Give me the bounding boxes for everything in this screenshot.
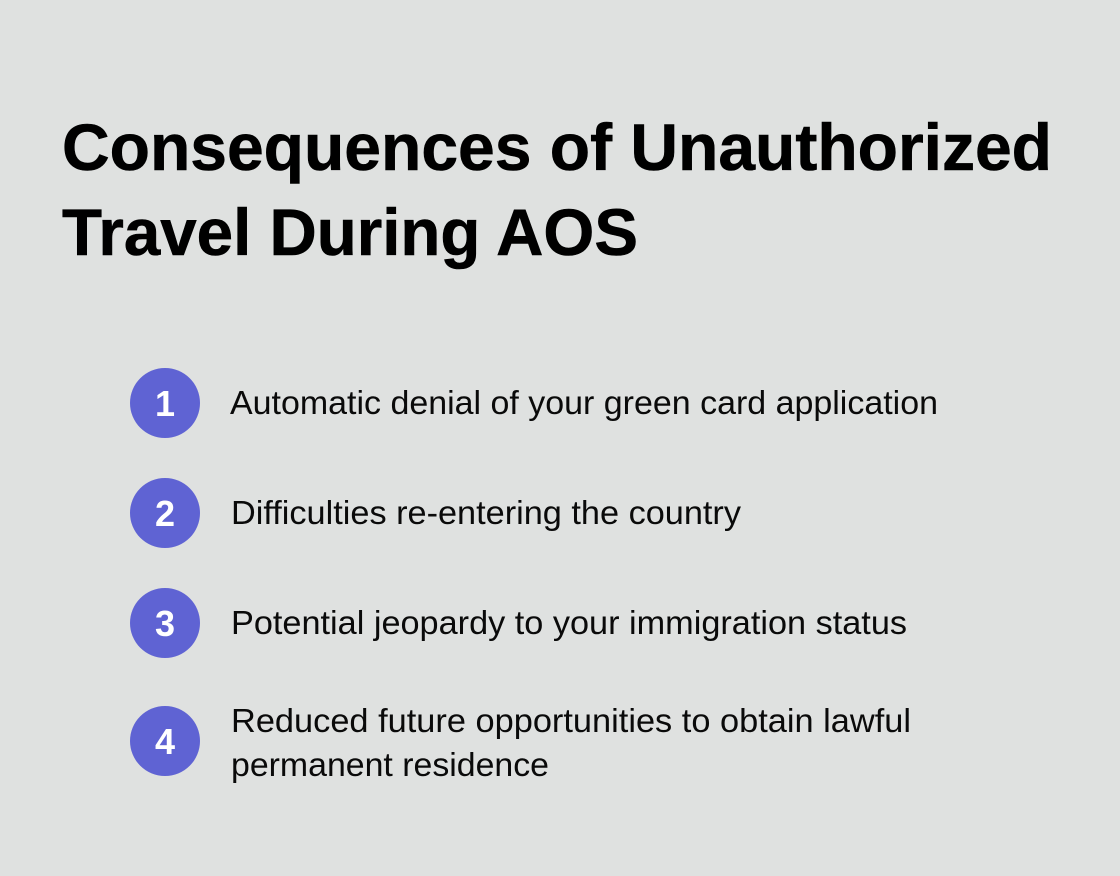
icon: number badge 1: 1 xyxy=(155,383,175,424)
list item 3 xyxy=(130,588,907,658)
icon: number badge 2: 2 xyxy=(155,493,175,534)
text: immigration status: Potential jeopardy to your immigration status xyxy=(231,604,907,641)
icon: number badge 3 xyxy=(130,588,200,658)
icon: number badge 1 xyxy=(130,368,200,438)
list item 1 xyxy=(130,368,938,438)
title: Travel During AOS xyxy=(62,195,638,269)
title xyxy=(62,110,1052,269)
text: reduced opportunities: permanent residence xyxy=(231,746,549,783)
text: reduced opportunities xyxy=(231,702,911,783)
icon: number badge 3: 3 xyxy=(155,603,175,644)
text: re-entry difficulties: Difficulties re-entering the country xyxy=(231,494,742,531)
icon: number badge 2 xyxy=(130,478,200,548)
list item 2 xyxy=(130,478,742,548)
text: reduced opportunities: Reduced future opportunities to obtain lawful xyxy=(231,702,911,739)
text: automatic denial: Automatic denial of your green card application xyxy=(230,384,938,421)
title: Consequences of Unauthorized xyxy=(62,110,1052,184)
icon: number badge 4 xyxy=(130,706,200,776)
icon: number badge 4: 4 xyxy=(155,721,175,762)
list item 4 xyxy=(130,702,911,783)
